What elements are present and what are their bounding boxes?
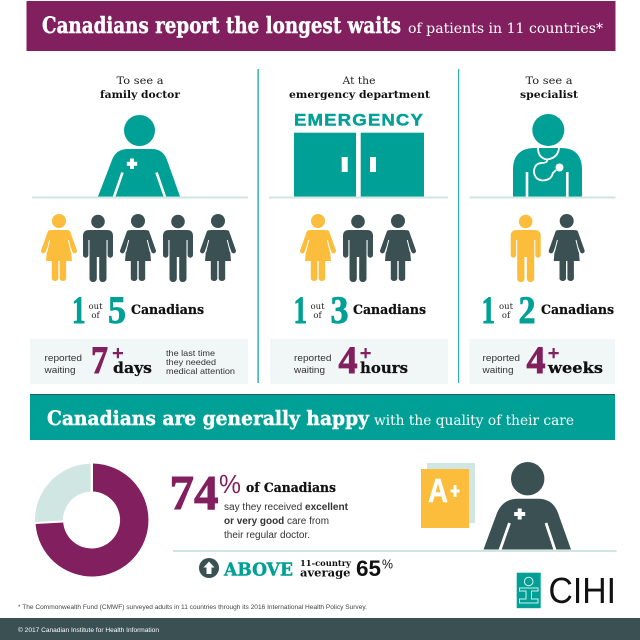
section banner: happy with care: with the quality of their care [374, 413, 574, 429]
heading: specialist: To see a [526, 75, 572, 87]
logo: CIHI [517, 570, 616, 611]
comparison: above 11-country average: 11-country [300, 559, 352, 569]
callout: 4+ hours [270, 339, 448, 384]
title banner [26, 1, 616, 51]
callout: 4+ hours: reported [294, 353, 332, 364]
callout: 7+ days: they needed [166, 357, 216, 367]
comparison: above 11-country average: 65 [356, 556, 381, 581]
section banner: happy with care [30, 394, 615, 440]
text: survey result: say they received excellent [224, 502, 349, 513]
heading: specialist [520, 75, 578, 101]
comparison: above 11-country average: % [382, 556, 393, 572]
icon: A+ grade card [421, 463, 475, 528]
heading: specialist: specialist [520, 89, 578, 101]
icon: patient [484, 462, 571, 550]
section banner: happy with care: Canadians are generally happy [47, 406, 370, 430]
panel: family doctor [30, 75, 248, 384]
panel: specialist [470, 75, 616, 384]
stat: 74% of Canadians: of Canadians [246, 481, 336, 496]
footer bar [0, 618, 640, 640]
callout: 4+ weeks [470, 339, 615, 384]
callout: 7+ days [30, 339, 248, 384]
people: 1 in 2 [511, 214, 582, 282]
stat: 1 out of 2 Canadians: 1 [482, 289, 495, 332]
stat: 1 out of 2 Canadians [482, 289, 614, 332]
stat: 74% of Canadians: 74 [170, 465, 218, 520]
stat: 1 out of 5 Canadians: 5 [108, 289, 126, 332]
comparison: above 11-country average [199, 556, 393, 581]
callout: 4+ hours: waiting [293, 365, 325, 376]
icon: emergency doors [269, 110, 448, 198]
callout: 4+ hours: hours [360, 359, 408, 377]
stat: 1 out of 2 Canadians: out [499, 302, 514, 312]
footnote: * The Commonwealth Fund (CMWF) surveyed adults in 11 countries through its 2016 International Health Policy Survey. [18, 604, 367, 611]
heading: family doctor [100, 75, 180, 101]
people: 1 in 5 [43, 214, 234, 282]
callout: 7+ days: 7 [91, 339, 108, 382]
stat: 1 out of 2 Canadians: 2 [518, 289, 536, 332]
stat: 1 out of 3 Canadians: 1 [294, 289, 307, 332]
logo: CIHI: CIHI [548, 570, 616, 611]
stat: 1 out of 2 Canadians: of [502, 311, 511, 321]
callout: 4+ hours: 4 [338, 339, 358, 382]
people: 1 in 3 [302, 214, 414, 282]
stat: 1 out of 3 Canadians: of [313, 311, 322, 321]
panel: emergency department [269, 75, 448, 384]
comparison: above 11-country average: ABOVE [223, 560, 293, 581]
title banner: Canadians report the longest waits [42, 13, 401, 39]
stat: 1 out of 3 Canadians: Canadians [353, 303, 426, 318]
title banner: of patients in 11 countries* [408, 21, 603, 37]
callout: 4+ weeks: waiting [481, 365, 514, 376]
callout: 7+ days: medical attention [166, 366, 235, 376]
stat: 1 out of 5 Canadians [72, 289, 204, 332]
heading: family doctor: To see a [116, 75, 164, 87]
heading: emergency department: emergency department [289, 89, 430, 101]
callout: 7+ days: reported [44, 353, 82, 364]
callout: 7+ days: the last time [166, 348, 215, 358]
callout: 4+ weeks: 4 [526, 339, 546, 382]
icon: A+ grade card: A [428, 472, 448, 509]
callout: 7+ days: days [113, 359, 152, 377]
icon: emergency doors: EMERGENCY [294, 110, 424, 130]
heading: family doctor: family doctor [100, 89, 180, 101]
callout: 4+ weeks: weeks [547, 359, 603, 377]
stat: 74% of Canadians [170, 465, 349, 541]
callout: 7+ days: waiting [43, 365, 76, 376]
text: survey result [224, 502, 349, 541]
stat: 1 out of 5 Canadians: Canadians [131, 303, 204, 318]
icon: family doctor [32, 115, 248, 198]
icon: specialist with stethoscope [470, 114, 616, 198]
donut chart: 74% [35, 464, 148, 576]
stat: 1 out of 5 Canadians: 1 [72, 289, 86, 332]
heading: emergency department [289, 75, 430, 101]
stat: 1 out of 3 Canadians: out [310, 302, 325, 312]
text: survey result: their regular doctor. [224, 530, 310, 541]
icon: up arrow [199, 558, 219, 578]
callout: 4+ weeks: reported [482, 353, 520, 364]
stat: 74% of Canadians: % [219, 469, 241, 499]
text: survey result: or very good care from [224, 516, 329, 527]
comparison: above 11-country average: average [300, 566, 350, 580]
stat: 1 out of 5 Canadians: out [88, 302, 103, 312]
stat: 1 out of 2 Canadians: Canadians [541, 303, 614, 318]
heading: emergency department: At the [341, 75, 376, 87]
stat: 1 out of 5 Canadians: of [91, 311, 100, 321]
footer bar: © 2017 Canadian Institute for Health Information [18, 626, 159, 634]
stat: 1 out of 3 Canadians: 3 [330, 289, 348, 332]
stat: 1 out of 3 Canadians [294, 289, 426, 332]
